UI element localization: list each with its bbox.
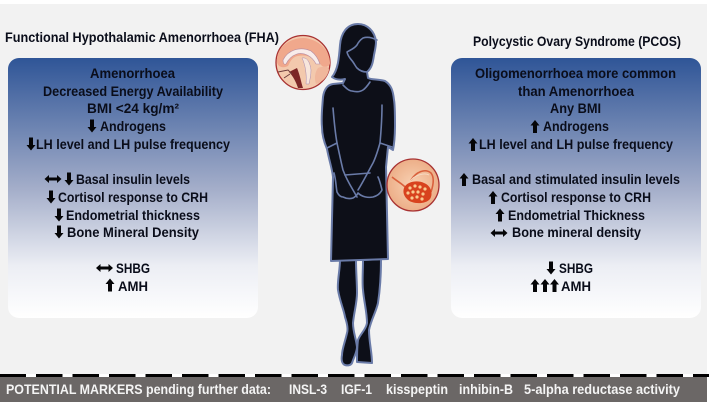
icon: triple up arrows AMH	[530, 279, 559, 292]
heading: FHA: Functional Hypothalamic Amenorrhoea (FHA)	[5, 29, 279, 45]
text: BMI: BMI <24 kg/m²	[87, 101, 180, 116]
text: oligomenorrhoea: Oligomenorrhoea more common	[475, 66, 676, 81]
text: inhibin-B: inhibin-B	[459, 381, 513, 397]
icon: down arrow insulin	[64, 172, 74, 186]
panel: FHA	[8, 58, 258, 318]
icon: down arrow LH	[26, 138, 36, 150]
text: insulin: Basal and stimulated insulin levels	[472, 172, 680, 187]
text: LH: LH level and LH pulse frequency	[36, 137, 230, 152]
icon: down arrow androgens	[88, 120, 96, 132]
icon: down arrow cortisol	[46, 190, 56, 204]
text: androgens: Androgens	[100, 119, 166, 134]
text: than amenorrhoea: than Amenorrhoea	[518, 84, 634, 99]
text: insulin: Basal insulin levels	[76, 172, 190, 187]
icon: brain circle	[276, 36, 330, 90]
text: SHBG: SHBG	[116, 261, 150, 276]
text: endometrial: Endometrial Thickness	[508, 208, 645, 223]
icon: down arrow SHBG	[546, 262, 556, 274]
text: endometrial: Endometrial thickness	[66, 208, 200, 223]
heading: PCOS: Polycystic Ovary Syndrome (PCOS)	[473, 33, 681, 49]
dashed divider	[0, 374, 709, 377]
icon: up arrow endometrial	[496, 208, 504, 222]
text: energy availability: Decreased Energy Availability	[43, 84, 223, 99]
text: AMH: AMH	[561, 279, 591, 294]
icon: ovary circle	[387, 159, 439, 211]
icon: down arrow endometrial	[54, 208, 64, 222]
icon: up arrow androgens	[530, 120, 540, 133]
icon: sideways arrow insulin	[44, 175, 62, 183]
text: kisspeptin: kisspeptin	[386, 381, 448, 397]
text: cortisol: Cortisol response to CRH	[58, 190, 208, 205]
panel: PCOS	[451, 58, 701, 318]
text: IGF-1: IGF-1	[341, 381, 372, 397]
text: androgens: Androgens	[543, 119, 609, 134]
figure: woman silhouette	[322, 24, 395, 365]
text: any BMI: Any BMI	[550, 101, 601, 116]
icon: sideways arrow SHBG	[96, 264, 113, 272]
text: Amenorrhoea: Amenorrhoea	[90, 66, 175, 81]
text: bone: Bone mineral density	[512, 225, 641, 240]
figure inner lines	[327, 37, 392, 199]
text: banner label: POTENTIAL MARKERS pending further data:	[6, 381, 271, 397]
text: 5-alpha reductase: 5-alpha reductase activity	[524, 381, 680, 397]
icon: up arrow insulin	[460, 173, 468, 186]
banner: potential markers	[0, 377, 707, 402]
icon: up arrow AMH	[106, 278, 114, 292]
text: bone: Bone Mineral Density	[67, 225, 199, 240]
text: SHBG: SHBG	[559, 261, 593, 276]
icon: sideways arrow bone	[490, 229, 508, 237]
text: LH: LH level and LH pulse frequency	[479, 137, 673, 152]
text: cortisol: Cortisol response to CRH	[501, 190, 651, 205]
icon: up arrow cortisol	[488, 191, 498, 204]
text: AMH: AMH	[118, 279, 148, 294]
icon: up arrow LH	[468, 138, 478, 151]
text: INSL-3: INSL-3	[289, 381, 327, 397]
icon: down arrow bone	[54, 226, 64, 238]
